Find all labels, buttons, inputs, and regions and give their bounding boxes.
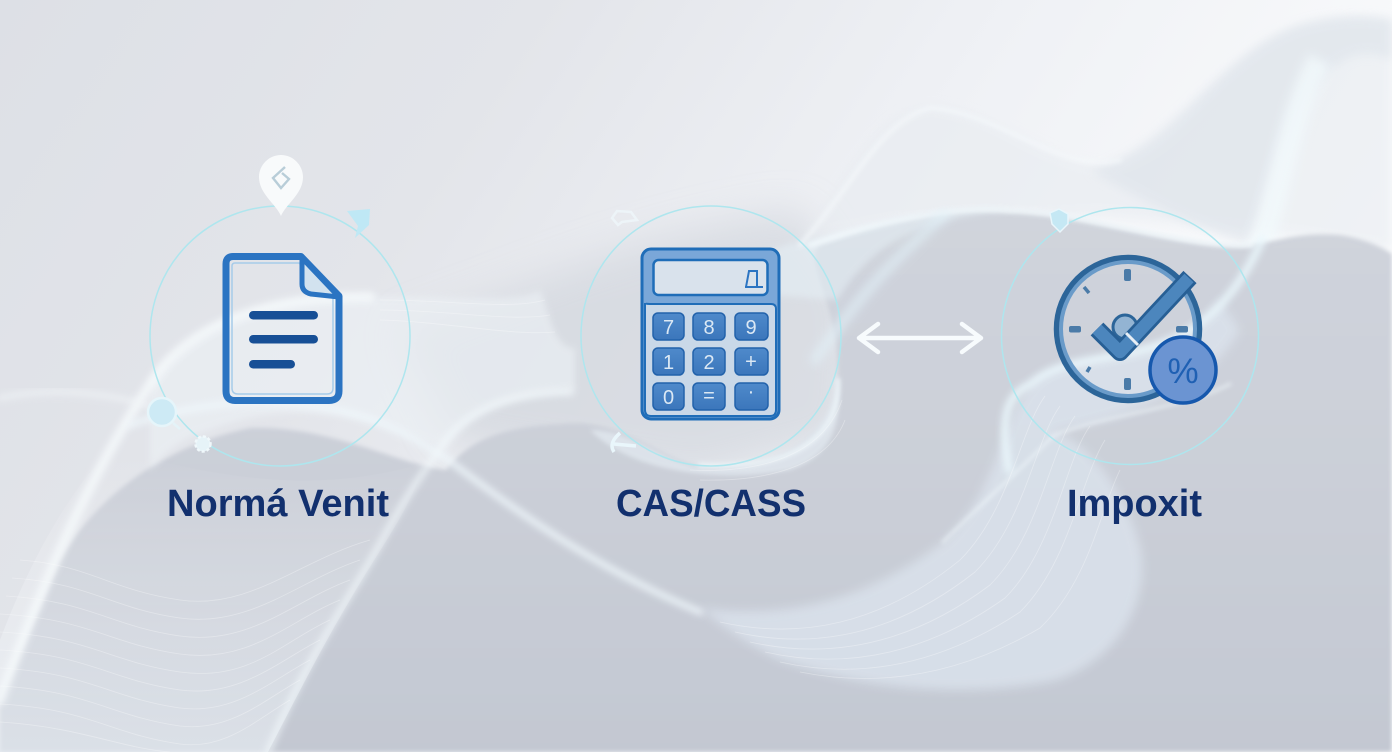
label: CAS/CASS: CAS/CASS	[616, 483, 806, 525]
icon: gear	[196, 436, 210, 452]
icon: magnifier	[148, 398, 180, 429]
icon: calculator: 9	[745, 317, 757, 339]
label: Impozit: Impoxit	[1067, 483, 1202, 525]
icon: calculator: 7	[663, 317, 674, 339]
icon: calculator	[642, 249, 779, 419]
icon: calculator: 0	[663, 387, 674, 409]
panel: Impozit	[1002, 208, 1258, 525]
icon: orbit arrow	[347, 209, 370, 238]
arrow: double headed	[859, 324, 981, 352]
ring: document orbit	[150, 206, 410, 466]
icon: calculator: +	[745, 351, 757, 373]
ring: clock orbit	[1002, 208, 1258, 464]
ring: calculator orbit	[581, 206, 841, 466]
icon: calculator: ·	[748, 381, 754, 403]
icon: small leaf	[1050, 209, 1068, 232]
background: fine line texture	[0, 300, 1120, 752]
background: upper right light folds	[800, 16, 1392, 345]
panel: Norma Venit	[148, 155, 410, 525]
background: dark lower wave body	[0, 210, 1392, 752]
icon: calculator: 2	[703, 352, 715, 374]
icon: clock with check and percent badge: %	[1167, 352, 1199, 391]
label: Norma Venit: Normá Venit	[167, 483, 389, 525]
icon: document	[226, 256, 339, 400]
background: bright strands	[0, 108, 1262, 752]
panel: CAS/CASS	[581, 206, 841, 525]
icon: clock with check and percent badge	[1058, 259, 1216, 403]
background: translucent ribbons	[0, 210, 1240, 752]
icon: small bottom arrow	[612, 433, 636, 452]
icon: small top arrow	[612, 211, 637, 225]
background: grey wash behind the middle ring	[400, 210, 860, 480]
icon: location pin	[259, 155, 303, 216]
icon: calculator: 1	[663, 352, 674, 374]
icon: calculator: 8	[703, 317, 715, 339]
icon: calculator: =	[703, 385, 715, 407]
